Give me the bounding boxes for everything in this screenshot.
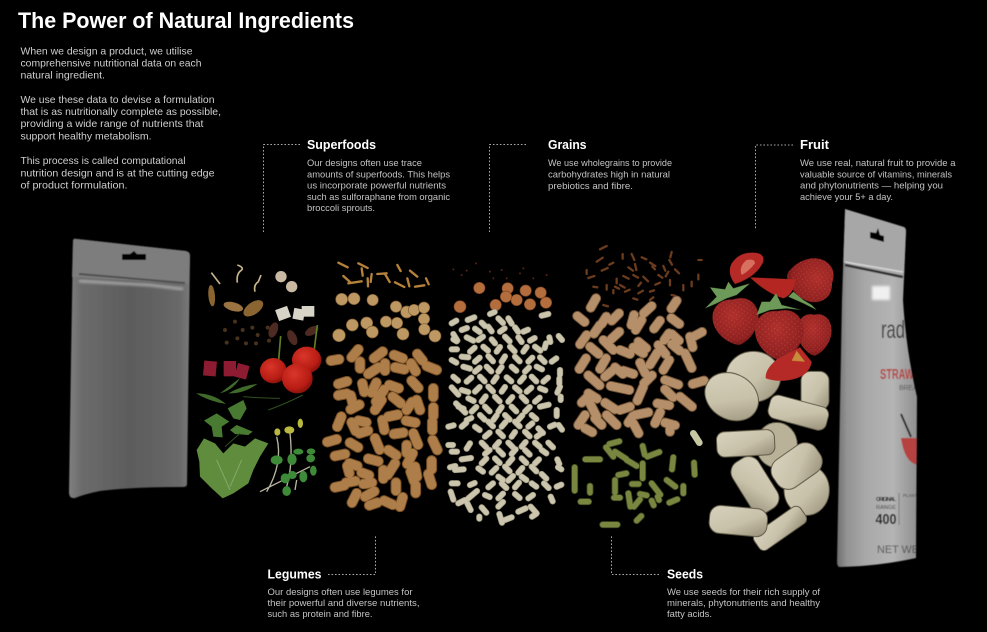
callout: fruit: achieve your 5+ a day. xyxy=(800,192,893,203)
callout: superfoods: Our designs often use trace xyxy=(307,158,422,169)
callout: legumes: such as protein and fibre. xyxy=(268,609,372,620)
radix strawberry pouch xyxy=(836,208,918,568)
kale xyxy=(197,438,268,498)
golden grains xyxy=(338,263,429,287)
pouch range badge xyxy=(875,493,916,525)
callout: fruit: valuable source of vitamins, minerals xyxy=(800,170,952,180)
callout: seeds: minerals, phytonutrients and healthy xyxy=(667,598,820,609)
callout: fruit: Fruit xyxy=(800,137,830,152)
callout: fruit: We use real, natural fruit to provide a xyxy=(800,158,956,169)
callout: legumes: Legumes xyxy=(268,566,322,582)
callout: grains: Grains xyxy=(548,137,586,152)
pouch net weight: NET WEIGHT xyxy=(877,544,945,556)
tomatoes xyxy=(260,347,321,393)
pouch range badge: RANGE xyxy=(876,505,896,511)
pumpkin seeds xyxy=(575,441,695,525)
callout: superfoods: Superfoods xyxy=(307,137,376,152)
beans xyxy=(327,349,437,507)
callout: seeds: Seeds xyxy=(667,566,703,582)
banana slices xyxy=(696,351,830,553)
callout: superfoods: us incorporate powerful nutrients xyxy=(307,181,446,192)
callout: grains: prebiotics and fibre. xyxy=(548,181,633,192)
rice xyxy=(448,312,562,523)
cocoa nibs xyxy=(267,321,320,347)
ingredient group: fruit xyxy=(696,253,836,553)
strawberry leaves xyxy=(705,282,817,315)
strawberries xyxy=(710,254,836,363)
callout: grains: We use wholegrains to provide xyxy=(548,158,672,169)
pouch range badge: ORIGINAL xyxy=(876,497,897,503)
round pulses xyxy=(333,293,441,342)
intro text block: nutrition design and is at the cutting edge xyxy=(20,168,215,180)
callout: superfoods: amounts of superfoods. This helps xyxy=(307,170,450,180)
callout: superfoods xyxy=(264,137,450,232)
microgreens xyxy=(260,419,317,496)
buckwheat xyxy=(454,282,552,313)
callout: legumes: Our designs often use legumes for xyxy=(268,587,412,598)
pouch flavour: STRAWBERRY xyxy=(880,366,946,383)
pouch range badge: PLANT BASED xyxy=(903,493,935,498)
herbs xyxy=(196,378,257,437)
callout: legumes: their powerful and diverse nutrients, xyxy=(268,598,420,609)
empty pouch xyxy=(69,239,190,498)
radix strawberry pouch: BREAKFAST xyxy=(899,385,940,392)
cubes xyxy=(275,306,314,321)
callout: grains xyxy=(490,137,672,232)
intro text block: natural ingredient. xyxy=(20,70,105,82)
ingredient group: legumes xyxy=(327,263,441,507)
ingredient group: grains xyxy=(448,262,562,523)
oats xyxy=(207,285,266,320)
intro text block: When we design a product, we utilise xyxy=(20,46,193,58)
callout: seeds: We use seeds for their rich supply of xyxy=(667,587,820,598)
callout: seeds xyxy=(612,535,820,620)
title: The Power of Natural Ingredients xyxy=(18,8,354,33)
stems xyxy=(279,325,317,375)
ingredient group: superfoods xyxy=(196,265,321,498)
intro text block: support healthy metabolism. xyxy=(20,130,152,142)
intro text block: providing a wide range of nutrients that xyxy=(20,118,204,130)
sprouts xyxy=(211,265,261,292)
callout: grains: carbohydrates high in natural xyxy=(548,170,670,180)
pale pumpkin seed xyxy=(693,433,699,443)
ingredient group: seeds xyxy=(575,246,704,525)
beet cubes xyxy=(203,360,250,380)
intro text block: that is as nutritionally complete as possible, xyxy=(20,106,221,118)
pouch range badge: 400 xyxy=(876,511,896,528)
callout: fruit xyxy=(756,137,956,230)
callout: seeds: fatty acids. xyxy=(667,609,712,620)
callout: superfoods: broccoli sprouts. xyxy=(307,203,375,214)
strawberry halves xyxy=(730,253,812,381)
specks xyxy=(452,262,548,279)
pouch bowl icon xyxy=(901,414,920,465)
callout: legumes xyxy=(268,535,420,620)
intro text block: We use these data to devise a formulation xyxy=(20,94,215,106)
mushrooms xyxy=(275,271,297,292)
peppercorns xyxy=(223,320,271,345)
intro text block: This process is called computational xyxy=(20,155,186,167)
pouch brand: radix xyxy=(881,316,917,344)
intro text block: comprehensive nutritional data on each xyxy=(20,58,202,70)
flax seeds xyxy=(587,246,702,306)
callout: fruit: and phytonutrients — helping you xyxy=(800,181,943,192)
callout: superfoods: such as sulforaphane from organic xyxy=(307,192,450,203)
almonds / sunflower seeds xyxy=(577,298,704,433)
intro text block: of product formulation. xyxy=(20,180,128,192)
intro text block xyxy=(20,46,221,192)
